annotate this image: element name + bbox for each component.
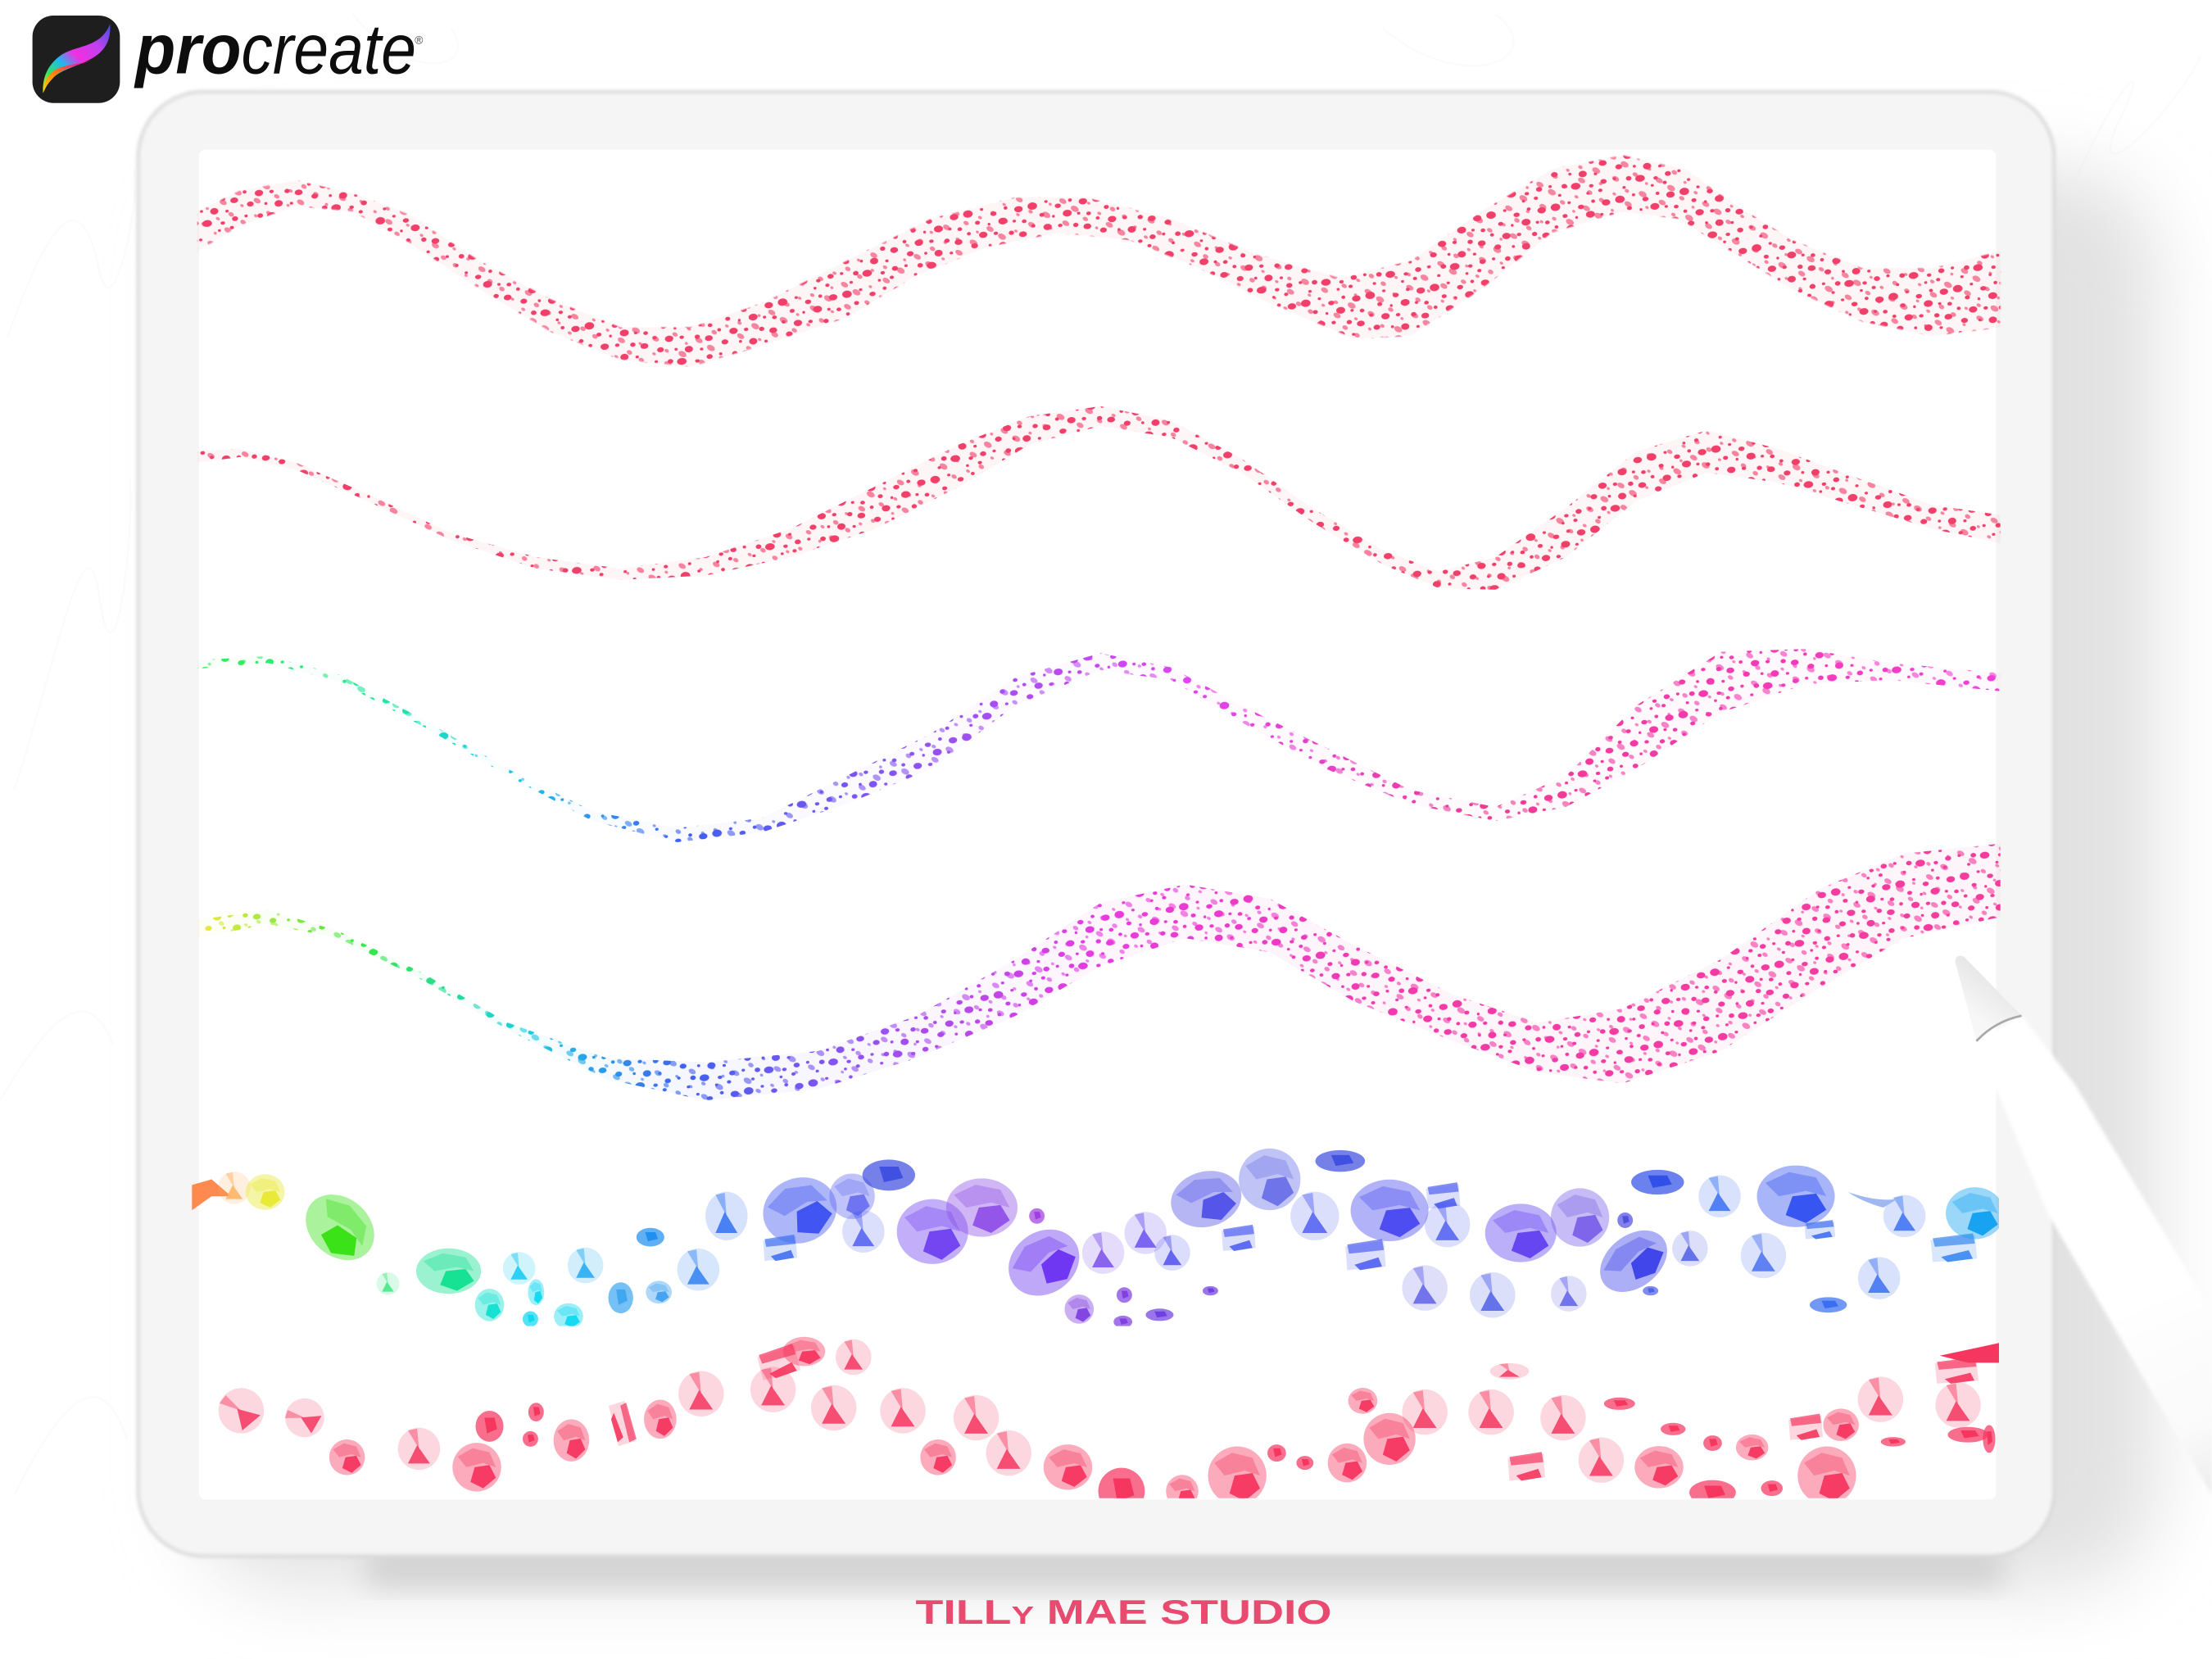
tablet shadow <box>190 170 2159 1587</box>
brush stroke 2: thin-to-thick pink speckle wave <box>197 406 2001 590</box>
brush stroke 4: rainbow thick speckle wave <box>197 844 2001 1100</box>
apple pencil <box>1956 956 2212 1495</box>
brush stroke 3: rainbow thin speckle wave <box>197 649 2001 842</box>
procreate logo <box>33 11 423 103</box>
tablet screen <box>199 150 1997 1499</box>
brush stroke 5: rainbow gem wave <box>192 1149 2004 1329</box>
pencil nib <box>1956 956 2022 1041</box>
wordmark: create <box>241 11 416 89</box>
brush stroke 6: red gem wave <box>209 1337 1999 1515</box>
wordmark: pro <box>134 11 241 89</box>
registered mark: ® <box>415 34 423 46</box>
brush stroke 1: pink speckle wave <box>197 155 2001 367</box>
tablet frame <box>138 92 2054 1556</box>
icon: procreate app <box>33 16 120 103</box>
studio credit: TILL Y MAE STUDIO <box>916 1593 1332 1631</box>
